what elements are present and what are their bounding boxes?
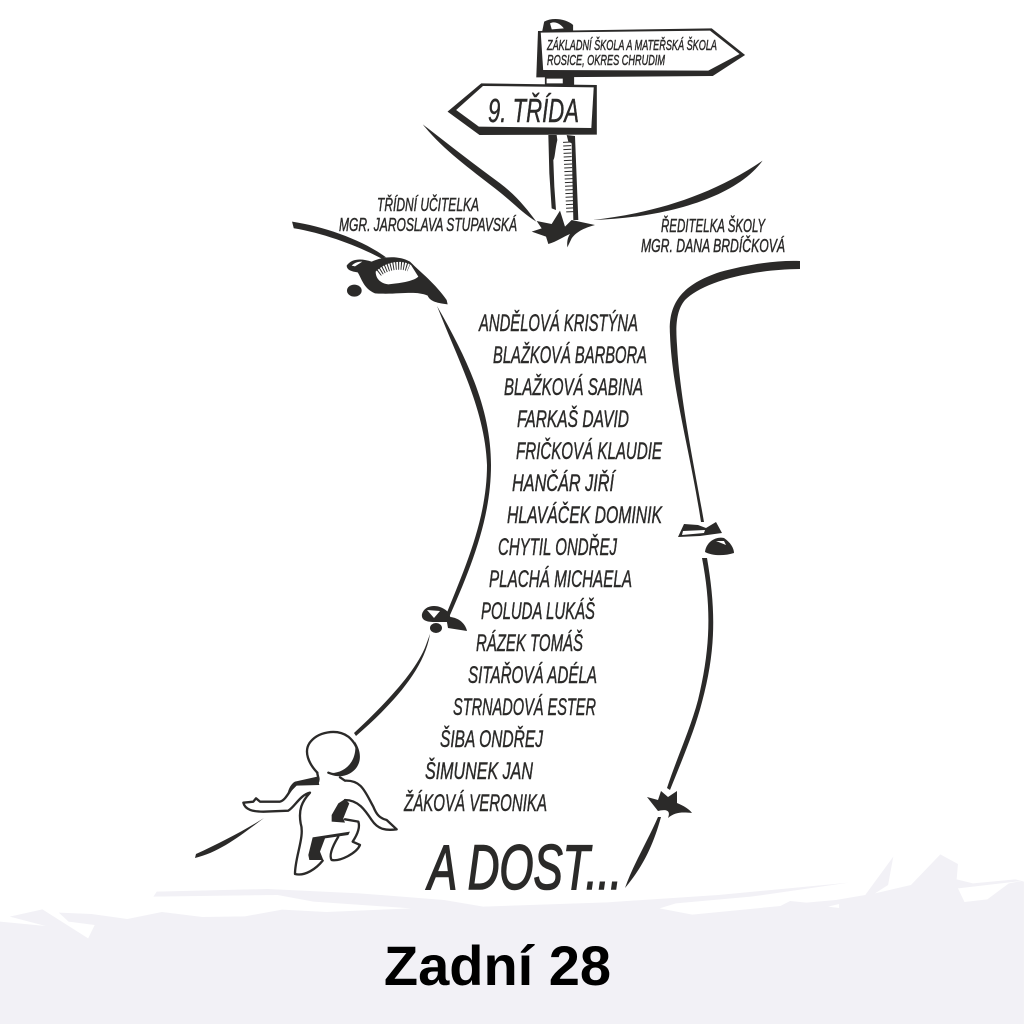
- school sign text: ROSICE, OKRES CHRUDIM: [547, 53, 666, 69]
- student name list: BLAŽKOVÁ SABINA: [504, 374, 643, 401]
- road edge: left lower: [354, 634, 430, 736]
- student name list: SITAŘOVÁ ADÉLA: [468, 662, 597, 689]
- school sign text: [546, 37, 717, 69]
- post top section: [542, 19, 574, 86]
- closing text: A DOST...: [425, 833, 622, 903]
- road edge: right upper: [670, 261, 800, 522]
- stones left: [422, 606, 467, 633]
- student name list: ŽÁKOVÁ VERONIKA: [403, 790, 547, 817]
- class teacher label: MGR. JAROSLAVA STUPAVSKÁ: [339, 214, 517, 235]
- road edge: right lower: [667, 558, 713, 790]
- student name list: RÁZEK TOMÁŠ: [476, 629, 583, 657]
- headmistress label: ŘEDITELKA ŠKOLY: [661, 215, 766, 236]
- figure: [243, 732, 397, 874]
- figure right arm: [340, 777, 397, 830]
- headmistress label: MGR. DANA BRDÍČKOVÁ: [641, 235, 785, 256]
- student name list: PLACHÁ MICHAELA: [489, 566, 632, 593]
- sign: school: [536, 28, 745, 77]
- student name list: POLUDA LUKÁŠ: [481, 597, 595, 625]
- figure head: [307, 732, 358, 775]
- student name list: [403, 310, 663, 817]
- class sign text: 9. TŘÍDA: [488, 92, 579, 129]
- student name list: BLAŽKOVÁ BARBORA: [493, 342, 647, 369]
- road edge: right bottom: [625, 817, 661, 888]
- rock shape on left road edge: [347, 257, 448, 304]
- road edge: left bottom: [195, 818, 264, 858]
- background terrain band: [0, 854, 1024, 1024]
- school sign text: ZÁKLADNÍ ŠKOLA A MATEŘSKÁ ŠKOLA: [546, 37, 717, 54]
- student name list: ŠIMUNEK JAN: [425, 757, 533, 785]
- class teacher label: TŘÍDNÍ UČITELKA: [377, 194, 479, 215]
- tuft right: [647, 791, 692, 818]
- road edge: left upper: [437, 306, 491, 622]
- student name list: STRNADOVÁ ESTER: [453, 694, 596, 721]
- student name list: FARKAŠ DAVID: [517, 405, 629, 433]
- student name list: ANDĚLOVÁ KRISTÝNA: [478, 310, 638, 337]
- post: [548, 135, 578, 220]
- headmistress label: [641, 215, 785, 256]
- stones right: [678, 522, 734, 555]
- figure left arm and side: [243, 773, 323, 874]
- student name list: CHYTIL ONDŘEJ: [498, 534, 618, 561]
- road edge: upper right: [593, 161, 763, 220]
- student name list: HANČÁR JIŘÍ: [512, 469, 616, 497]
- student name list: HLAVÁČEK DOMINIK: [507, 501, 663, 529]
- student name list: ŠIBA ONDŘEJ: [440, 725, 544, 753]
- signpost: [292, 19, 763, 259]
- road edge: far left: [292, 222, 386, 259]
- caption: Zadní 28: [384, 934, 611, 997]
- sign: class: [448, 83, 597, 135]
- tuft at foot of post: [532, 211, 595, 247]
- road edge: upper left: [423, 124, 536, 222]
- class teacher label: [339, 194, 517, 235]
- student name list: FRIČKOVÁ KLAUDIE: [516, 437, 663, 465]
- figure legs: [331, 819, 360, 860]
